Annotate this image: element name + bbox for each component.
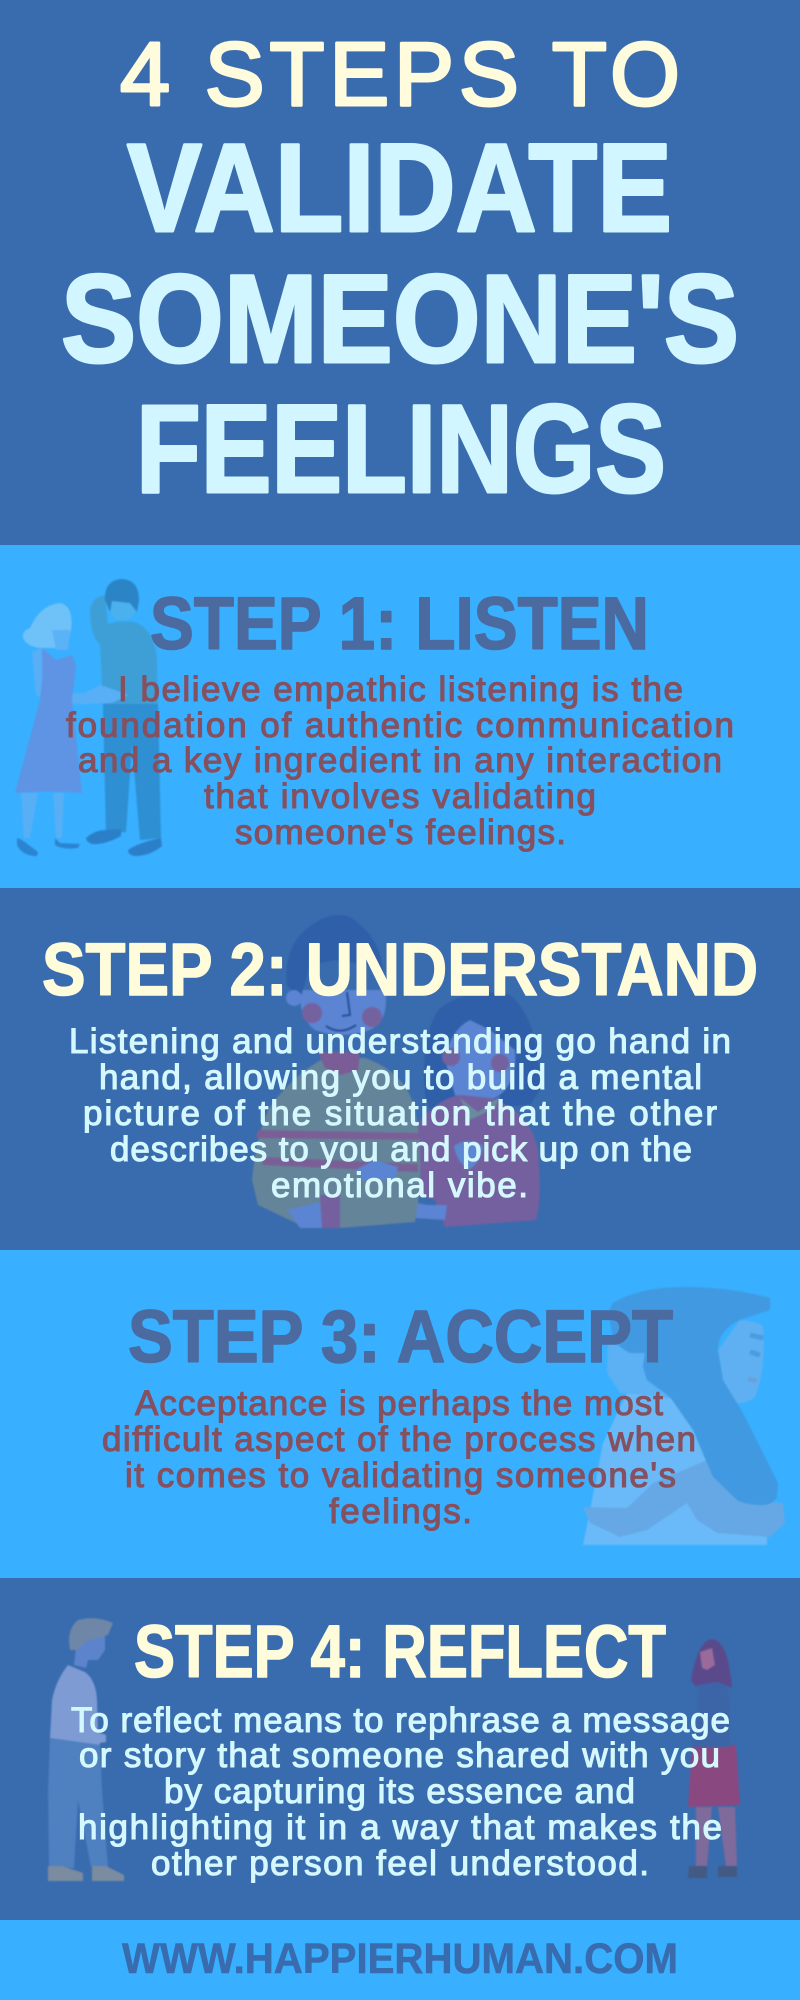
- panel: step 4 reflect: [0, 1578, 800, 1920]
- title line: 4 steps to: 4 STEPS TO: [120, 25, 680, 125]
- heading: step 3: STEP 3: ACCEPT: [128, 1295, 673, 1378]
- panel: step 3 accept: [0, 1250, 800, 1578]
- body text: step 1: someone's feelings.: [235, 813, 566, 852]
- body text: step 3: Acceptance is perhaps the most: [135, 1384, 663, 1423]
- illustration: two people hugging: [583, 1287, 785, 1545]
- heading: step 1: STEP 1: LISTEN: [150, 582, 649, 665]
- title line: someone's: SOMEONE'S: [61, 250, 739, 389]
- body text: step 3: it comes to validating someone's: [125, 1456, 676, 1495]
- body text: step 1: foundation of authentic communication: [66, 706, 734, 745]
- panel: footer: [0, 1920, 800, 2000]
- body text: step 1: and a key ingredient in any interaction: [78, 741, 722, 780]
- title line: feelings: FEELINGS: [136, 380, 666, 519]
- body text: step 2: describes to you and pick up on the: [110, 1130, 692, 1169]
- body text: step 2: [69, 1022, 731, 1205]
- body text: step 2: emotional vibe.: [271, 1166, 528, 1205]
- body text: step 1: I believe empathic listening is the: [118, 670, 683, 709]
- panel: step 2 understand: [0, 888, 800, 1250]
- body text: step 3: [102, 1384, 696, 1531]
- body text: step 1: that involves validating: [204, 777, 596, 816]
- panel: title header: [0, 0, 800, 545]
- illustration: man standing: [48, 1618, 124, 1881]
- body text: step 2: picture of the situation that the other: [83, 1094, 717, 1133]
- body text: step 2: Listening and understanding go hand in: [69, 1022, 731, 1061]
- body text: step 4: or story that someone shared with you: [79, 1736, 720, 1775]
- body text: step 4: other person feel understood.: [151, 1844, 649, 1883]
- panel: step 1 listen: [0, 545, 800, 888]
- body text: step 4: highlighting it in a way that makes the: [78, 1808, 722, 1847]
- body text: step 3: difficult aspect of the process when: [102, 1420, 696, 1459]
- body text: step 2: hand, allowing you to build a mental: [99, 1058, 702, 1097]
- body text: step 4: [71, 1701, 730, 1883]
- body text: step 1: [66, 670, 734, 852]
- body text: step 4: To reflect means to rephrase a message: [71, 1701, 730, 1740]
- illustration: couple standing: [15, 579, 162, 856]
- footer website url: WWW.HAPPIERHUMAN.COM: [122, 1935, 678, 1983]
- illustration: woman standing: [688, 1639, 740, 1878]
- body text: step 3: feelings.: [329, 1492, 472, 1531]
- title line: validate: VALIDATE: [127, 119, 672, 258]
- illustration: smiling couple: [252, 915, 540, 1228]
- body text: step 4: by capturing its essence and: [164, 1772, 635, 1811]
- heading: step 4: STEP 4: REFLECT: [134, 1610, 666, 1693]
